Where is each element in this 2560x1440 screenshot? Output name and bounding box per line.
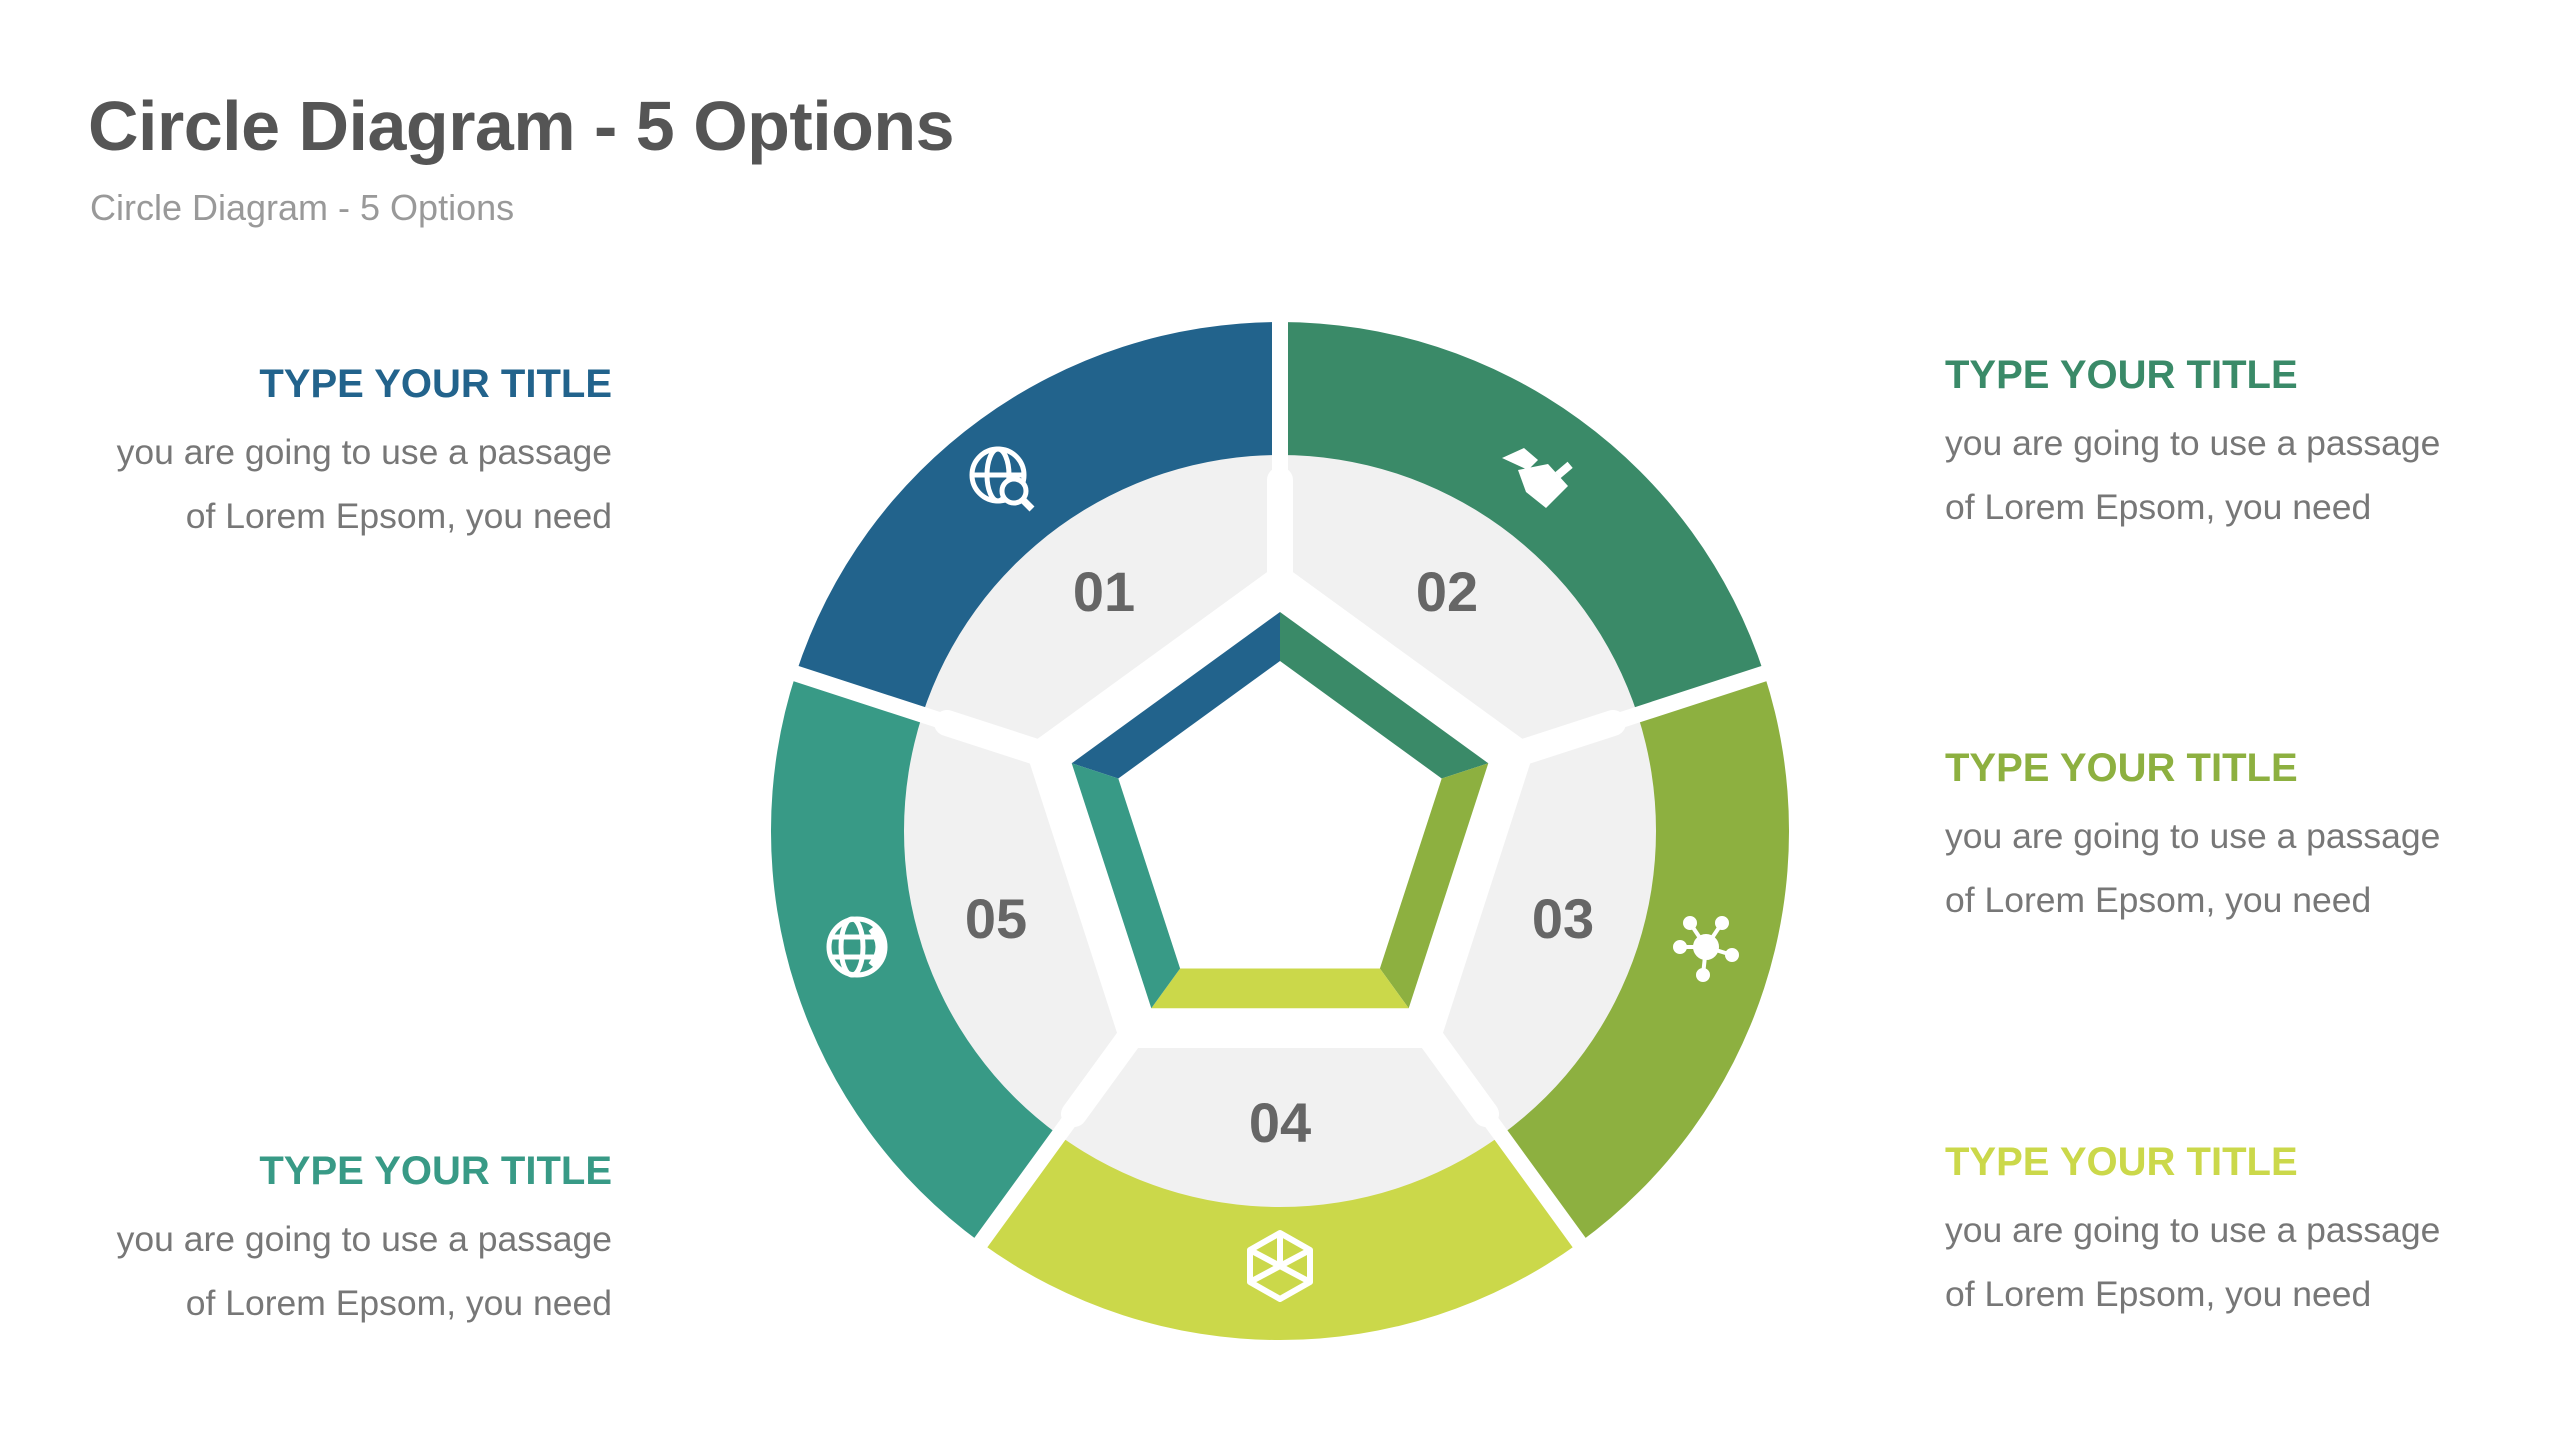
numbers: 03 <box>1532 887 1594 950</box>
segment 5 <box>771 674 1059 1243</box>
icon: globe search <box>972 449 1032 509</box>
numbers <box>965 560 1594 1154</box>
subtitle: Circle Diagram - 5 Options <box>90 187 514 228</box>
gray inner ring <box>900 451 1660 1211</box>
white pentagon backdrop <box>1046 585 1514 1030</box>
text block: option 1: of Lorem Epsom, you need <box>186 496 612 536</box>
text block: option 2 <box>1945 353 2440 527</box>
pentagon edge 5 <box>1072 763 1180 1008</box>
text block: option 3 <box>1945 746 2440 920</box>
text block: option 5: TYPE YOUR TITLE <box>259 1149 612 1193</box>
text block: option 5 <box>116 1149 612 1323</box>
pentagon edge 3 <box>1380 763 1488 1008</box>
segment 2 <box>1280 322 1764 715</box>
text block: option 1 <box>116 362 612 536</box>
icon: globe phone <box>829 919 885 975</box>
text block: option 4 <box>1945 1140 2440 1314</box>
text block: option 3: you are going to use a passage <box>1945 816 2440 856</box>
text block: option 5: you are going to use a passage <box>117 1219 612 1259</box>
text block: option 4: TYPE YOUR TITLE <box>1945 1140 2298 1184</box>
text block: option 1: TYPE YOUR TITLE <box>259 362 612 406</box>
title: Circle Diagram - 5 Options <box>88 87 954 165</box>
text block: option 4: you are going to use a passage <box>1945 1210 2440 1250</box>
icon: cube <box>1250 1233 1310 1299</box>
icon: network <box>1675 918 1737 980</box>
text block: option 3: TYPE YOUR TITLE <box>1945 746 2298 790</box>
pentagon edge 4 <box>1151 968 1409 1008</box>
text block: option 1: you are going to use a passage <box>117 432 612 472</box>
segment 3 <box>1501 674 1789 1243</box>
numbers: 05 <box>965 887 1027 950</box>
numbers: 04 <box>1249 1091 1311 1154</box>
text block: option 2: of Lorem Epsom, you need <box>1945 487 2371 527</box>
icon: handshake <box>1502 448 1573 508</box>
text block: option 2: you are going to use a passage <box>1945 423 2440 463</box>
pentagon edge 1 <box>1072 612 1280 778</box>
text block: option 2: TYPE YOUR TITLE <box>1945 353 2298 397</box>
text block: option 5: of Lorem Epsom, you need <box>186 1283 612 1323</box>
numbers: 01 <box>1073 560 1135 623</box>
pentagon edge 2 <box>1280 612 1488 778</box>
segment 1 <box>796 322 1280 715</box>
text block: option 3: of Lorem Epsom, you need <box>1945 880 2371 920</box>
text block: option 4: of Lorem Epsom, you need <box>1945 1274 2371 1314</box>
numbers: 02 <box>1416 560 1478 623</box>
segment 4 <box>981 1135 1579 1340</box>
